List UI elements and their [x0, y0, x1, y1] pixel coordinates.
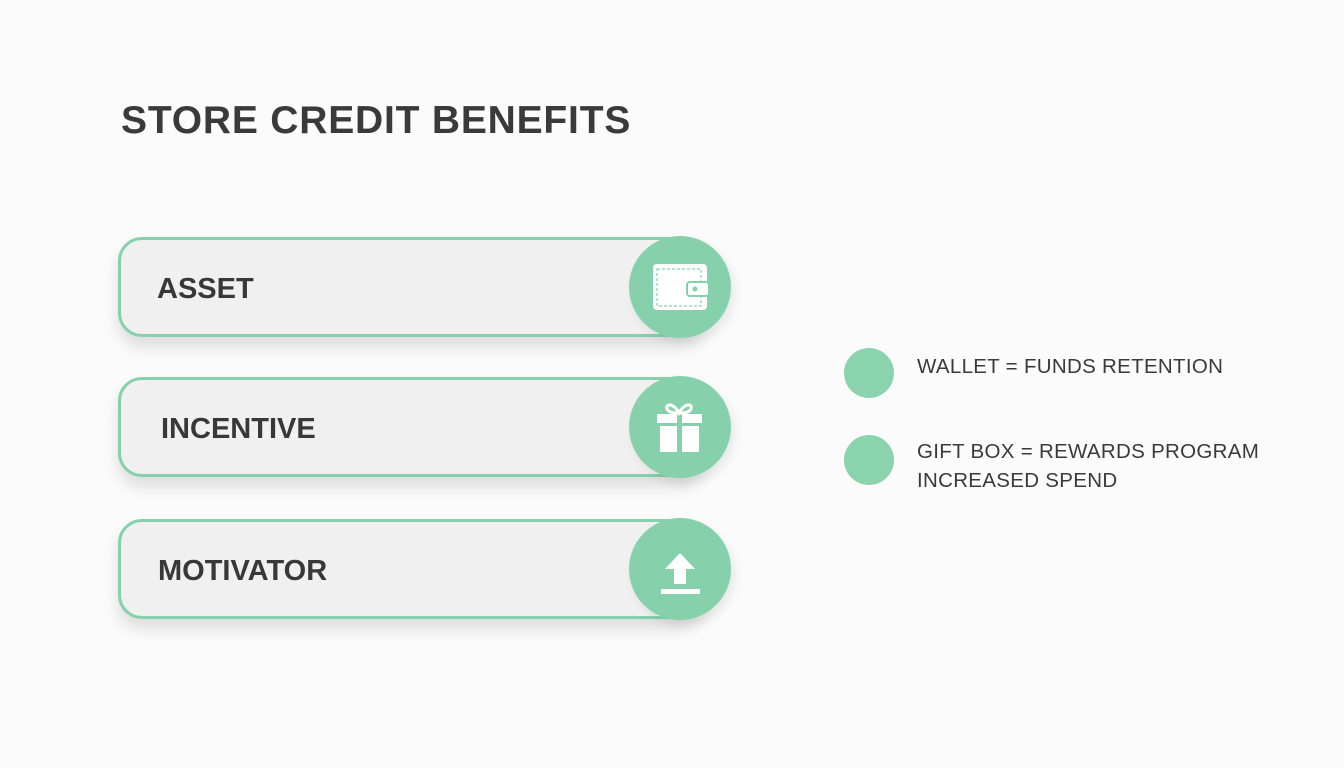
legend: wallet: WALLET = FUNDS RETENTION [917, 355, 1223, 378]
icon: gift [629, 376, 731, 478]
title: STORE CREDIT BENEFITS [121, 99, 631, 142]
icon: wallet [629, 236, 731, 338]
legend: wallet [844, 348, 1223, 398]
panel: asset [118, 237, 704, 337]
legend: gift box [844, 435, 1259, 492]
panel: motivator [118, 519, 704, 619]
legend: gift box: INCREASED SPEND [917, 469, 1117, 492]
panel: motivator: MOTIVATOR [158, 555, 327, 587]
panel: incentive: INCENTIVE [161, 413, 316, 445]
icon: upload arrow [629, 518, 731, 620]
panel: asset: ASSET [157, 273, 254, 305]
panel: incentive [118, 377, 704, 477]
legend: gift box: GIFT BOX = REWARDS PROGRAM [917, 440, 1259, 463]
